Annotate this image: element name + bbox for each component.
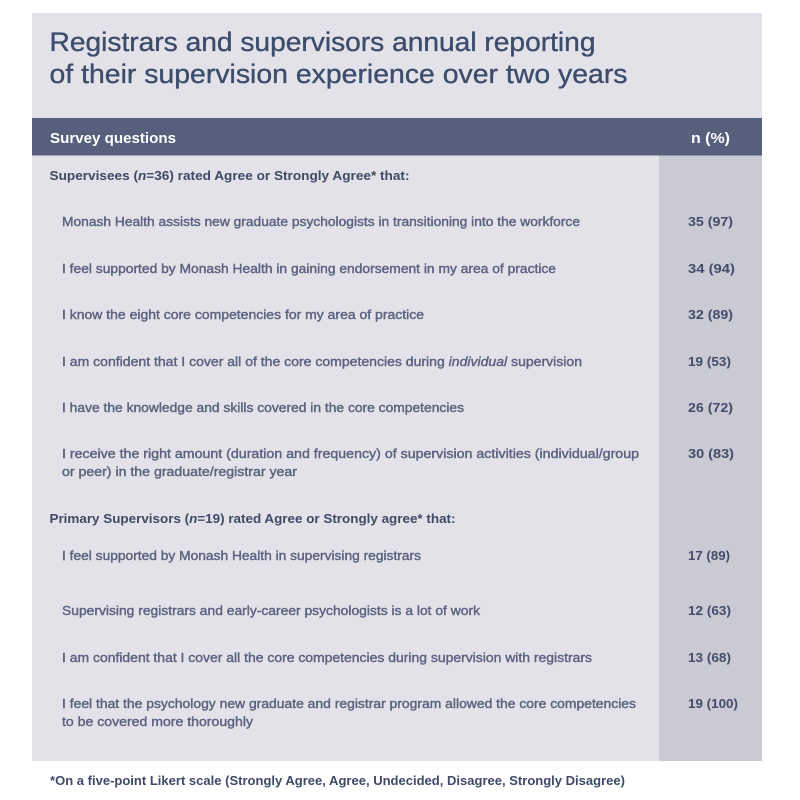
section: supervisees	[50, 168, 735, 479]
row 5	[62, 400, 733, 415]
row 10: 19 (100)	[688, 696, 738, 711]
title	[50, 27, 628, 89]
row 3: I know the eight core competencies for my area of practice	[62, 308, 424, 322]
row 2: 34 (94)	[688, 261, 735, 276]
table header: n (%)	[691, 130, 730, 147]
row 3: 32 (89)	[688, 307, 733, 322]
row 4: I am confident that I cover all of the core competencies during individual supervision	[62, 355, 582, 369]
row 9: 13 (68)	[688, 650, 731, 665]
row 5: 26 (72)	[688, 400, 733, 415]
title: Registrars and supervisors annual reporting	[50, 27, 596, 57]
row 10: to be covered more thoroughly	[62, 715, 254, 729]
row 5: I have the knowledge and skills covered in the core competencies	[62, 401, 464, 415]
row 7	[62, 548, 730, 563]
row 10	[62, 696, 738, 729]
results column background	[659, 155, 762, 761]
section: primary supervisors	[50, 511, 738, 729]
row 9	[62, 650, 731, 665]
row 7: I feel supported by Monash Health in supervising registrars	[62, 549, 421, 563]
section heading: supervisees: Supervisees ( n=36) rated Agree or Strongly Agree* that:	[50, 168, 410, 183]
row 9: I am confident that I cover all the core competencies during supervision with registrars	[62, 651, 592, 665]
row 8: Supervising registrars and early-career psychologists is a lot of work	[62, 604, 481, 618]
row 6: I receive the right amount (duration and frequency) of supervision activities (individual/group	[62, 447, 639, 461]
table header: Survey questions	[50, 130, 176, 147]
row 1: Monash Health assists new graduate psychologists in transitioning into the workforce	[62, 215, 580, 229]
row 8: 12 (63)	[688, 603, 731, 618]
row 3	[62, 307, 733, 322]
title: of their supervision experience over two years	[50, 59, 628, 89]
section heading: primary supervisors: Primary Supervisors ( n=19) rated Agree or Strongly agree* that:	[50, 511, 456, 526]
row 8	[62, 603, 731, 618]
row 1: 35 (97)	[688, 214, 733, 229]
table header	[32, 118, 762, 156]
row 7: 17 (89)	[688, 548, 730, 563]
row 6: or peer) in the graduate/registrar year	[62, 465, 297, 479]
row 2: I feel supported by Monash Health in gaining endorsement in my area of practice	[62, 262, 556, 276]
footnote: *On a five-point Likert scale (Strongly Agree, Agree, Undecided, Disagree, Strongly Disagree)	[50, 773, 625, 788]
row 4: 19 (53)	[688, 354, 731, 369]
row 6: 30 (83)	[688, 446, 734, 461]
row 1	[62, 214, 733, 229]
row 10: I feel that the psychology new graduate and registrar program allowed the core competencies	[62, 697, 636, 711]
row 6	[62, 446, 734, 479]
row 2	[62, 261, 735, 276]
